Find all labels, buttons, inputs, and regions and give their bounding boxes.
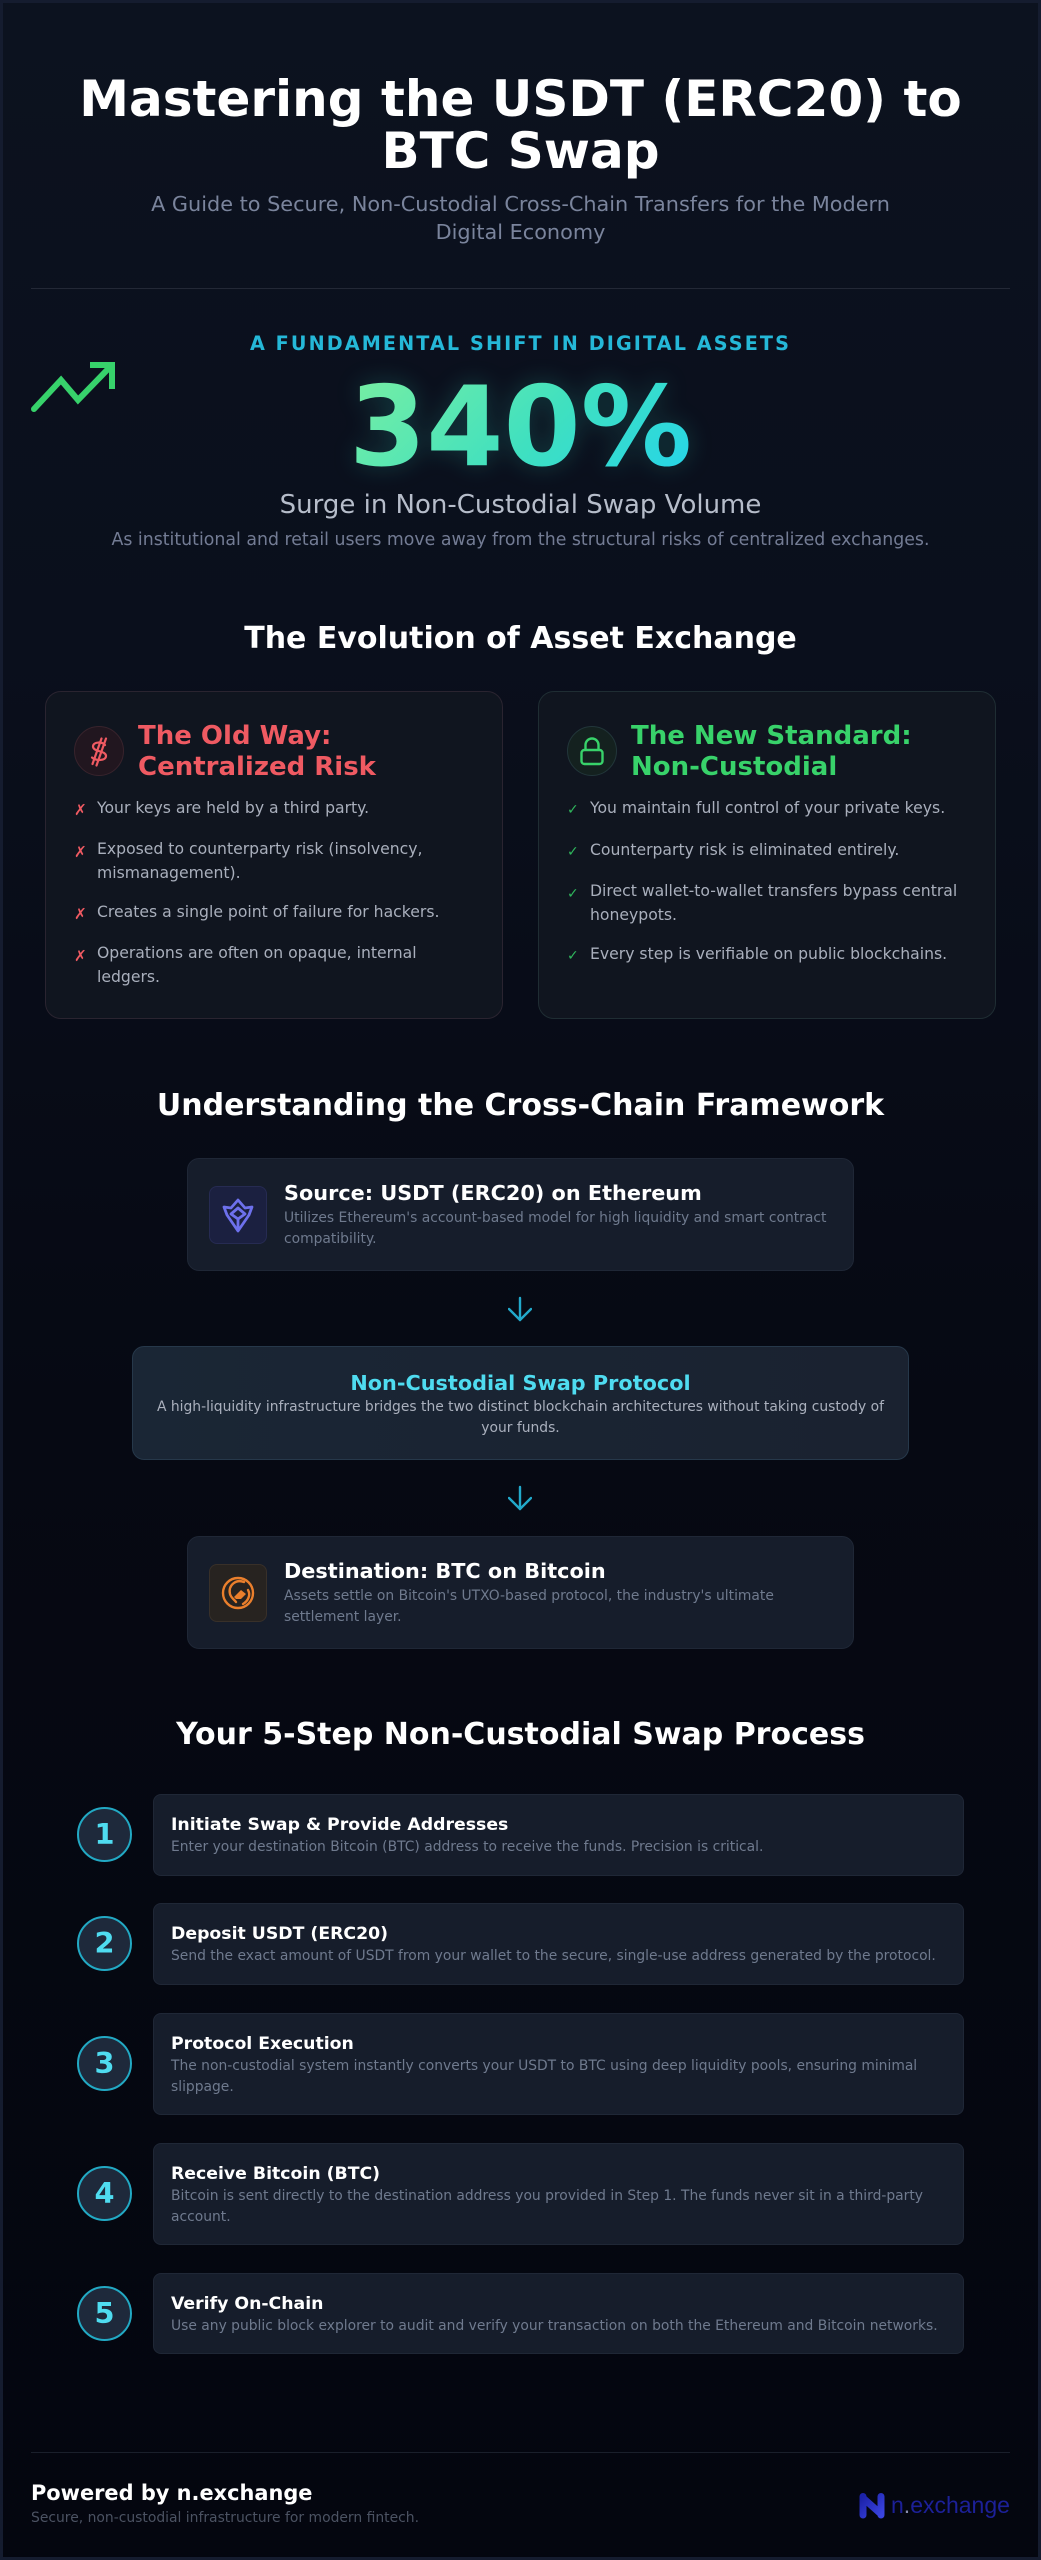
- new standard list: Every step is verifiable on public blockchains.: [590, 944, 947, 963]
- new standard list: You maintain full control of your private keys.: [590, 798, 945, 817]
- destination description: settlement layer.: [284, 1609, 402, 1625]
- step 1 title: Initiate Swap & Provide Addresses: [171, 1815, 508, 1835]
- icon: trending up arrow: [31, 362, 115, 412]
- old way list: Exposed to counterparty risk (insolvency,: [97, 839, 422, 858]
- old way title: Centralized Risk: [138, 752, 376, 782]
- new standard list: ✓: [567, 948, 579, 964]
- protocol description: A high-liquidity infrastructure bridges the two distinct blockchain architectures without taking custody of: [157, 1399, 884, 1415]
- step 1 description: Enter your destination Bitcoin (BTC) address to receive the funds. Precision is critical.: [171, 1839, 763, 1855]
- title: BTC Swap: [381, 122, 660, 180]
- hero kicker: A FUNDAMENTAL SHIFT IN DIGITAL ASSETS: [250, 332, 791, 355]
- icon: bitcoin: [209, 1564, 267, 1622]
- new standard list: Counterparty risk is eliminated entirely.: [590, 840, 899, 859]
- flow: protocol: [132, 1346, 909, 1460]
- flow: destination: [187, 1536, 854, 1649]
- step 5 description: Use any public block explorer to audit and verify your transaction on both the Ethereum and Bitcoin networks.: [171, 2318, 938, 2334]
- old way list: Your keys are held by a third party.: [97, 798, 369, 817]
- heading: steps: Your 5-Step Non-Custodial Swap Process: [176, 1717, 865, 1752]
- new standard list: honeypots.: [590, 905, 677, 924]
- step 5 number: [77, 2286, 132, 2341]
- step 3 number: 3: [94, 2046, 115, 2080]
- step 3 description: [171, 2058, 917, 2095]
- destination description: Assets settle on Bitcoin's UTXO-based protocol, the industry's ultimate: [284, 1588, 774, 1604]
- step 5 number: 5: [94, 2296, 115, 2330]
- step 1 number: 1: [94, 1817, 115, 1851]
- new standard list: ✓: [567, 886, 579, 902]
- old way title: The Old Way:: [138, 721, 331, 751]
- destination title: Destination: BTC on Bitcoin: [284, 1559, 606, 1583]
- hero caption: Surge in Non-Custodial Swap Volume: [280, 490, 761, 520]
- step 1 number: [77, 1807, 132, 1862]
- step 3 description: The non-custodial system instantly converts your USDT to BTC using deep liquidity pools, ensuring minimal: [171, 2058, 917, 2074]
- step 3 number: [77, 2036, 132, 2091]
- step 4 number: 4: [94, 2176, 115, 2210]
- old way list: ✗: [74, 947, 87, 965]
- new standard list: ✓: [567, 844, 579, 860]
- step 2 number: 2: [94, 1926, 115, 1960]
- old way list: ✗: [74, 801, 87, 819]
- old way title: [138, 721, 376, 782]
- hero statistic 340%: 340%: [349, 363, 692, 492]
- icon: crossed dollar: [74, 726, 124, 776]
- step 2 title: Deposit USDT (ERC20): [171, 1924, 388, 1944]
- step 4 card: [153, 2143, 964, 2245]
- old way list: [74, 798, 439, 986]
- protocol description: [157, 1399, 884, 1436]
- step 2 number: [77, 1916, 132, 1971]
- step 4 description: Bitcoin is sent directly to the destination address you provided in Step 1. The funds never sit in a third-party: [171, 2188, 923, 2204]
- old way list: ledgers.: [97, 967, 160, 986]
- step 2 description: Send the exact amount of USDT from your wallet to the secure, single-use address generated by the protocol.: [171, 1948, 936, 1964]
- title: [79, 70, 962, 180]
- new standard title: [631, 721, 912, 782]
- old way list: Operations are often on opaque, internal: [97, 943, 417, 962]
- subtitle: [151, 192, 890, 244]
- new standard list: Direct wallet-to-wallet transfers bypass central: [590, 881, 957, 900]
- arrow: [508, 1296, 532, 1322]
- icon: padlock: [567, 726, 617, 776]
- step 5 title: Verify On-Chain: [171, 2294, 323, 2314]
- source title: Source: USDT (ERC20) on Ethereum: [284, 1181, 702, 1205]
- footer brand line: Powered by n.exchange: [31, 2481, 312, 2505]
- step 4 title: Receive Bitcoin (BTC): [171, 2164, 380, 2184]
- step 4 description: account.: [171, 2209, 231, 2225]
- subtitle: Digital Economy: [436, 220, 605, 244]
- step 1 card: [153, 1794, 964, 1876]
- step 3 card: [153, 2013, 964, 2115]
- old way list: mismanagement).: [97, 863, 241, 882]
- panel: new standard: [538, 691, 996, 1019]
- new standard list: ✓: [567, 802, 579, 818]
- old way list: ✗: [74, 843, 87, 861]
- old way list: ✗: [74, 905, 87, 923]
- source description: [284, 1210, 826, 1247]
- source description: Utilizes Ethereum's account-based model for high liquidity and smart contract: [284, 1210, 826, 1226]
- step 3 description: slippage.: [171, 2079, 234, 2095]
- step 4 number: [77, 2166, 132, 2221]
- new standard title: Non-Custodial: [631, 752, 837, 782]
- heading: framework: Understanding the Cross-Chain Framework: [157, 1088, 884, 1123]
- title: Mastering the USDT (ERC20) to: [79, 70, 962, 128]
- new standard title: The New Standard:: [631, 721, 912, 751]
- old way list: Creates a single point of failure for hackers.: [97, 902, 439, 921]
- destination description: [284, 1588, 774, 1625]
- icon: ethereum: [209, 1186, 267, 1244]
- logo: n.exchange: n.exchange: [891, 2492, 1010, 2518]
- step 3 title: Protocol Execution: [171, 2034, 354, 2054]
- protocol description: your funds.: [481, 1420, 560, 1436]
- arrow: [508, 1486, 532, 1510]
- step 4 description: [171, 2188, 923, 2225]
- panel: old way: [45, 691, 503, 1019]
- new standard list: [567, 798, 957, 964]
- protocol title: Non-Custodial Swap Protocol: [350, 1371, 691, 1395]
- footer text: [31, 2481, 419, 2526]
- hero description: As institutional and retail users move away from the structural risks of centralized exchanges.: [112, 530, 929, 550]
- subtitle: A Guide to Secure, Non-Custodial Cross-Chain Transfers for the Modern: [151, 192, 890, 216]
- heading: evolution: The Evolution of Asset Exchange: [244, 621, 797, 656]
- flow: source: [187, 1158, 854, 1271]
- step 2 card: [153, 1903, 964, 1985]
- step 5 card: [153, 2273, 964, 2354]
- source description: compatibility.: [284, 1231, 377, 1247]
- footer tagline: Secure, non-custodial infrastructure for modern fintech.: [31, 2510, 419, 2526]
